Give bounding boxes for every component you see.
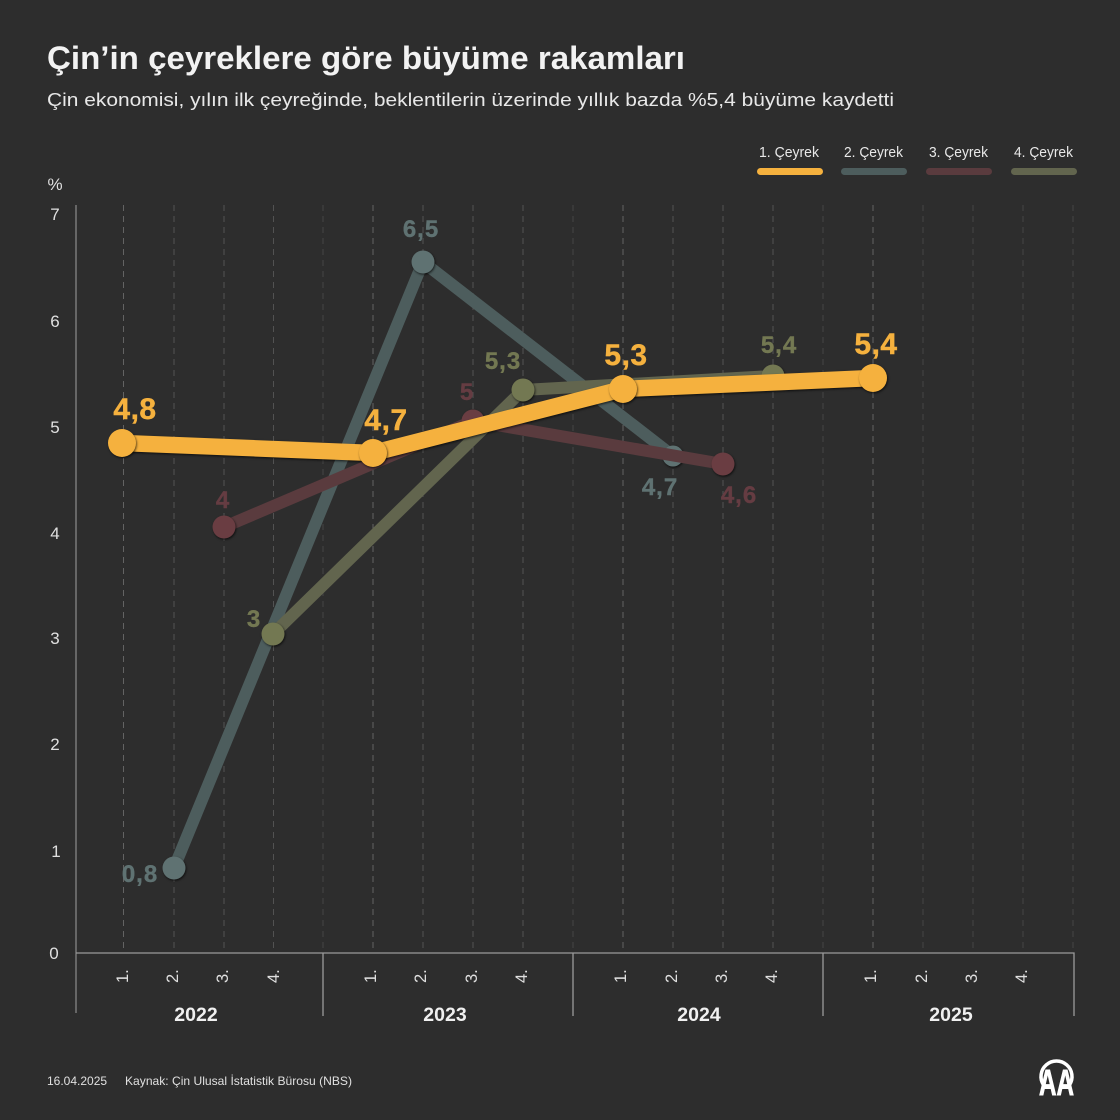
value labels: 3. Çeyrek: 5 [460,379,474,406]
legend [757,145,1077,175]
quarter tick labels: 3. [463,969,481,983]
line: 4. Çeyrek [262,364,784,646]
value labels: 1. Çeyrek: 4,7 [364,404,408,437]
value labels: 4. Çeyrek: 5,4 [761,332,797,359]
year labels [174,1004,973,1026]
date: 16.04.2025 [47,1074,107,1088]
quarter tick labels: 1. [612,969,630,983]
y axis labels: 4 [50,524,60,543]
value labels: 3. Çeyrek: 4,6 [721,482,757,509]
value labels: 3. Çeyrek: 4 [216,487,230,514]
value labels: 1. Çeyrek [113,328,898,437]
year labels: 2023 [423,1004,467,1026]
quarter tick labels: 4. [265,969,283,983]
title: Çin’in çeyreklere göre büyüme rakamları [47,40,685,76]
value labels: 4. Çeyrek [247,332,797,633]
quarter tick labels: 2. [913,969,931,983]
quarter tick labels: 3. [713,969,731,983]
line: 3. Çeyrek [212,410,734,538]
axes [76,205,1074,1016]
y axis labels: 0 [49,944,59,963]
year labels: 2024 [677,1004,721,1026]
quarter tick labels: 3. [963,969,981,983]
value labels: 4. Çeyrek: 5,3 [485,348,521,375]
quarter tick labels: 2. [164,969,182,983]
y axis labels: 7 [50,205,60,224]
quarter tick labels: 1. [862,969,880,983]
y axis labels: 2 [50,735,60,754]
y axis labels: 5 [50,418,60,437]
logo: AA [1039,1062,1074,1103]
value labels: 1. Çeyrek: 5,3 [604,339,648,372]
value labels: 3. Çeyrek [216,379,757,514]
legend: 1. Çeyrek [759,145,820,161]
quarter tick labels [114,969,1031,983]
quarter tick labels: 3. [214,969,232,983]
quarter tick labels: 1. [114,969,132,983]
quarter tick labels: 1. [362,969,380,983]
y axis labels: % [47,175,63,194]
y axis labels [47,175,63,963]
value labels: 2. Çeyrek [122,216,678,888]
quarter tick labels: 4. [763,969,781,983]
value labels: 4. Çeyrek: 3 [247,606,261,633]
y axis labels: 3 [50,629,60,648]
value labels: 2. Çeyrek: 4,7 [642,474,678,501]
legend: 3. Çeyrek [929,145,989,161]
y axis labels: 6 [50,312,60,331]
year labels: 2022 [174,1004,218,1026]
value labels: 2. Çeyrek: 6,5 [403,216,439,243]
quarter tick labels: 4. [513,969,531,983]
y axis labels: 1 [51,842,61,861]
value labels: 1. Çeyrek: 4,8 [113,393,157,426]
value labels: 1. Çeyrek: 5,4 [854,328,898,361]
source: Kaynak: Çin Ulusal İstatistik Bürosu (NBS) [125,1074,352,1088]
quarter tick labels: 4. [1013,969,1031,983]
line: 2. Çeyrek [162,250,684,880]
value labels: 2. Çeyrek: 0,8 [122,861,158,888]
quarter tick labels: 2. [663,969,681,983]
year labels: 2025 [929,1004,973,1026]
subtitle: Çin ekonomisi, yılın ilk çeyreğinde, beklentilerin üzerinde yıllık bazda %5,4 büyüme kaydetti [47,89,894,110]
quarter tick labels: 2. [412,969,430,983]
legend: 2. Çeyrek [844,145,904,161]
line: 1. Çeyrek [108,364,887,467]
legend: 4. Çeyrek [1014,145,1074,161]
